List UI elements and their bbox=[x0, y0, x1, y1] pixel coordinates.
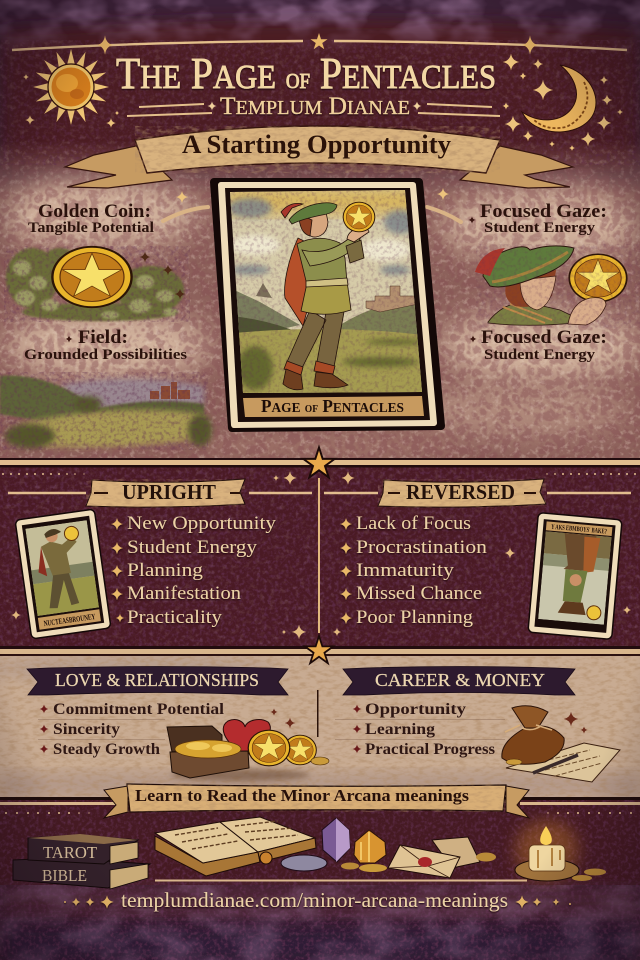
icon: tarot and bible books bbox=[13, 834, 150, 889]
text: Focused Gaze bottom: Focused Gaze: bbox=[481, 327, 607, 348]
icon: open book bbox=[155, 817, 316, 876]
small card: reversed bbox=[528, 513, 622, 639]
ribbon: career and money bbox=[343, 666, 575, 695]
icon: sealed envelope bbox=[388, 837, 496, 878]
ribbon: upright: UPRIGHT bbox=[122, 480, 216, 504]
center divider bbox=[11, 471, 631, 639]
list: upright: Student Energy bbox=[127, 537, 258, 558]
label strip bbox=[243, 396, 424, 417]
divider with star bbox=[0, 448, 640, 477]
list: reversed: Lack of Focus bbox=[356, 513, 471, 534]
banner: A Starting Opportunity bbox=[65, 126, 573, 188]
text: Focused Gaze top: Focused Gaze: bbox=[480, 201, 607, 222]
card art bbox=[225, 188, 425, 395]
ribbon: career and money: CAREER & MONEY bbox=[375, 670, 545, 690]
text: Focused Gaze bottom bbox=[469, 327, 607, 363]
text: Focused Gaze bottom: Student Energy bbox=[484, 347, 596, 363]
dark band lines bbox=[0, 797, 640, 805]
icon: crystals and stones bbox=[281, 818, 387, 872]
text: Field: Grounded Possibilities bbox=[24, 347, 187, 363]
banner: learn to read bbox=[104, 784, 529, 818]
icon: sun bbox=[33, 49, 109, 125]
dots row 2 bbox=[5, 812, 632, 814]
list: love: Steady Growth bbox=[53, 741, 160, 758]
list: career: Learning bbox=[365, 721, 435, 738]
list: upright: Manifestation bbox=[127, 583, 242, 604]
ribbon: reversed bbox=[324, 479, 631, 507]
icon: tarot and bible books: TAROT bbox=[43, 843, 98, 862]
list: love bbox=[38, 701, 505, 758]
main tarot card bbox=[214, 182, 441, 428]
text: Focused Gaze top: Student Energy bbox=[484, 220, 596, 236]
list: reversed bbox=[340, 513, 488, 628]
list: upright bbox=[111, 513, 277, 628]
banner: A Starting Opportunity: A Starting Opportunity bbox=[182, 130, 451, 159]
figure: page bbox=[281, 202, 375, 390]
list: upright: New Opportunity bbox=[127, 513, 277, 534]
list: reversed: Procrastination bbox=[356, 537, 488, 558]
list: career: Practical Progress bbox=[365, 741, 495, 758]
list: career bbox=[352, 701, 495, 758]
icon: treasure chest heart and coins bbox=[167, 708, 329, 781]
list: reversed: Poor Planning bbox=[356, 607, 474, 628]
small card: reversed: Y AKS EBMBOYS' BAKE? bbox=[551, 523, 608, 536]
icon: crescent moon and stars bbox=[23, 54, 623, 151]
text: Field bbox=[24, 327, 187, 363]
icon: golden coin on leaves bbox=[4, 246, 190, 322]
swooshes beside main card bbox=[163, 188, 461, 222]
list: love: Commitment Potential bbox=[53, 701, 225, 718]
dots row bbox=[2, 473, 636, 475]
ribbon: love and relationships bbox=[27, 666, 288, 695]
vertical divider bbox=[317, 690, 318, 737]
icon: coin pouch and letter bbox=[502, 706, 620, 782]
list: reversed: Immaturity bbox=[356, 560, 455, 581]
website url: templumdianae.com/minor-arcana-meanings bbox=[121, 888, 508, 912]
landscape: field bbox=[0, 372, 212, 450]
icon: page portrait with coin bbox=[475, 244, 640, 328]
text: Golden Coin: Golden Coin: bbox=[38, 201, 151, 222]
main tarot card: PAGE OF PENTACLES bbox=[261, 396, 404, 416]
banner: learn to read: Learn to Read the Minor Arcana meanings bbox=[135, 786, 469, 805]
shelf line bbox=[155, 880, 527, 882]
icon: tarot and bible books: BIBLE bbox=[42, 866, 87, 885]
icon: candle bbox=[515, 820, 606, 881]
text: Golden Coin: Tangible Potential bbox=[28, 220, 154, 236]
text: Golden Coin bbox=[28, 201, 154, 236]
title: THE PAGE OF PENTACLES bbox=[116, 49, 496, 98]
top ornamental line bbox=[12, 33, 627, 55]
subtitle bbox=[127, 93, 500, 120]
divider with star 2 bbox=[0, 636, 640, 663]
ribbon: upright bbox=[8, 479, 312, 507]
list: reversed: Missed Chance bbox=[356, 583, 482, 604]
small card: upright: NUCTEASBROUNEY bbox=[43, 612, 96, 628]
list: love: Sincerity bbox=[53, 721, 120, 738]
small card: upright bbox=[15, 509, 111, 639]
list: career: Opportunity bbox=[365, 701, 466, 718]
ribbon: love and relationships: LOVE & RELATIONSHIPS bbox=[55, 670, 259, 690]
text: Field: Field: bbox=[78, 327, 128, 348]
subtitle: TEMPLUM DIANAE bbox=[220, 93, 410, 120]
ribbon: reversed: REVERSED bbox=[406, 480, 515, 504]
list: upright: Practicality bbox=[127, 607, 223, 628]
text: Focused Gaze top bbox=[468, 201, 607, 236]
list: upright: Planning bbox=[127, 560, 204, 581]
